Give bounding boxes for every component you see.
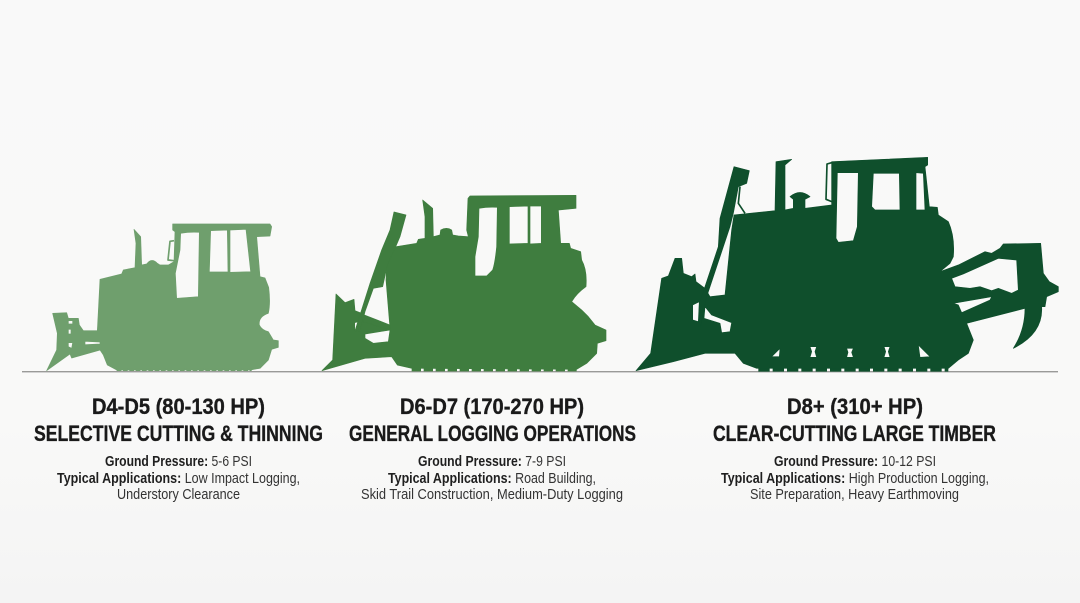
text block: D6-D7 class: GENERAL LOGGING OPERATIONS — [349, 421, 636, 446]
text block: D4-D5 class: Understory Clearance — [117, 487, 240, 503]
text block: D8+ class: CLEAR-CUTTING LARGE TIMBER — [713, 421, 996, 446]
ground line — [22, 371, 1058, 372]
text block: D8+ class: Site Preparation, Heavy Earthmoving — [750, 487, 959, 503]
text block: D8+ class: Ground Pressure: 10-12 PSI — [774, 454, 936, 470]
text block: D8+ class — [713, 394, 996, 503]
cab handrail — [826, 163, 832, 202]
text block: D4-D5 class: Ground Pressure: 5-6 PSI — [105, 454, 252, 470]
text block: D8+ class: Typical Applications: High Production Logging, — [721, 471, 989, 487]
handrail — [168, 241, 174, 261]
text block: D4-D5 class: SELECTIVE CUTTING & THINNING — [34, 421, 323, 446]
icon: small dozer D4-D5 silhouette — [47, 224, 278, 371]
text block: D6-D7 class: Ground Pressure: 7-9 PSI — [418, 454, 566, 470]
text block: D4-D5 class — [34, 394, 323, 503]
text block: D4-D5 class: Typical Applications: Low Impact Logging, — [57, 471, 300, 487]
text block: D4-D5 class: D4-D5 (80-130 HP) — [92, 394, 265, 419]
text block: D8+ class: D8+ (310+ HP) — [787, 394, 923, 419]
text block: D6-D7 class — [349, 394, 636, 503]
text block: D6-D7 class: Skid Trail Construction, Medium-Duty Logging — [361, 487, 623, 503]
text block: D6-D7 class: D6-D7 (170-270 HP) — [400, 394, 584, 419]
text block: D6-D7 class: Typical Applications: Road Building, — [388, 471, 596, 487]
icon: large dozer D8 silhouette with ripper — [636, 157, 1058, 371]
icon: medium dozer D6-D7 silhouette — [322, 195, 606, 371]
